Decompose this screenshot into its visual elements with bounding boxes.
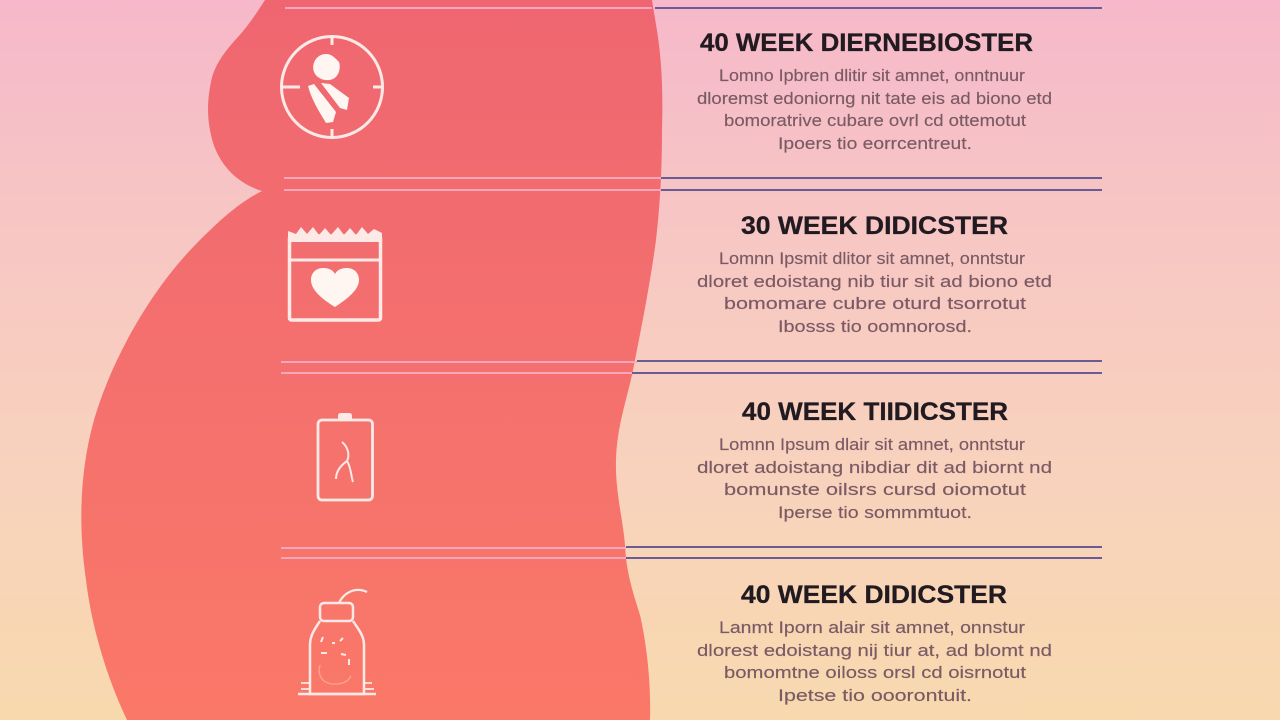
section 1 body: bomoratrive cubare ovrl cd ottemotut [724, 112, 1026, 130]
divider lines left [281, 8, 661, 558]
section 2 body [697, 250, 1052, 336]
section 2 heading: 30 WEEK DIDICSTER [741, 212, 1008, 240]
section 4 body: dlorest edoistang nij tiur at, ad blomt nd [697, 642, 1052, 660]
section 2 body: dloret edoistang nib tiur sit ad biono etd [697, 273, 1052, 291]
section 2 text [697, 212, 1052, 336]
section 1 body: Ipoers tio eorrcentreut. [778, 135, 972, 153]
divider lines right [626, 8, 1102, 558]
icon: baby in circle [282, 36, 384, 138]
icon: battery-shaped phone [318, 413, 372, 500]
section 3 body: Lomnn Ipsum dlair sit amnet, onntstur [719, 436, 1026, 454]
pregnant body silhouette [81, 0, 662, 720]
section 3 heading: 40 WEEK TIIDICSTER [742, 398, 1008, 426]
section 3 body: Iperse tio sommmtuot. [778, 504, 972, 522]
section 4 text [697, 581, 1052, 705]
section 1 body: Lomno Ipbren dlitir sit amnet, onntnuur [719, 67, 1026, 85]
section 2 body: Lomnn Ipsmit dlitor sit amnet, onntstur [719, 250, 1026, 268]
section 1 text [697, 29, 1052, 153]
section 4 body [697, 619, 1052, 705]
section 3 text [697, 398, 1052, 522]
section 2 body: bomomare cubre oturd tsorrotut [724, 295, 1027, 313]
section 3 body: bomunste oilsrs cursd oiomotut [724, 481, 1027, 499]
section 3 body: dloret adoistang nibdiar dit ad biornt nd [697, 459, 1052, 477]
icon: calendar with heart [288, 227, 382, 320]
section 1 body [697, 67, 1052, 153]
section 1 heading: 40 WEEK DIERNEBIOSTER [700, 29, 1033, 57]
section 3 body [697, 436, 1052, 522]
icon: jar with straw [298, 590, 376, 694]
section 4 heading: 40 WEEK DIDICSTER [741, 581, 1007, 609]
section 1 body: dloremst edoniorng nit tate eis ad biono etd [697, 90, 1052, 108]
section 4 body: bomomtne oiloss orsl cd oisrnotut [724, 664, 1027, 682]
section 4 body: Ipetse tio ooorontuit. [778, 687, 972, 705]
section 4 body: Lanmt Iporn alair sit amnet, onnstur [719, 619, 1026, 637]
section 2 body: Ibosss tio oomnorosd. [778, 318, 972, 336]
